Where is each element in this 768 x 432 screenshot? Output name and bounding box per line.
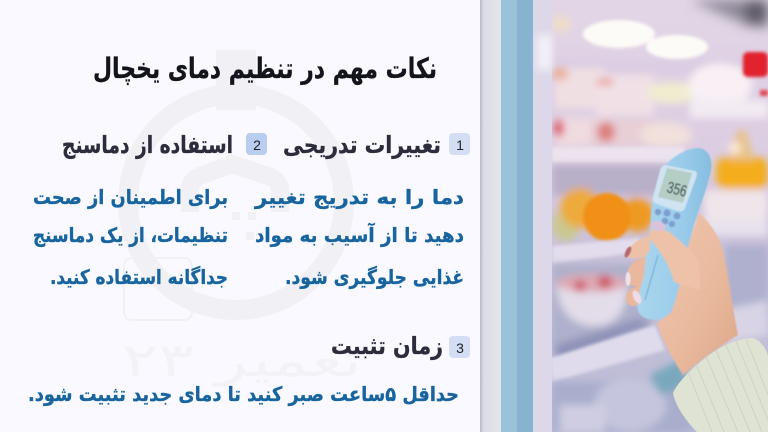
watermark: logo xyxy=(124,60,344,320)
oranges xyxy=(552,162,668,244)
photo: fridge interior xyxy=(480,0,768,432)
text block: item 1 column xyxy=(254,185,464,289)
small light xyxy=(550,16,572,32)
thermometer screen xyxy=(658,168,692,203)
bottom shelf xyxy=(550,325,665,382)
text block: item 1 column: دما را به تدریج تغییر xyxy=(254,185,464,209)
hand: thumb xyxy=(649,229,700,290)
lower shelf xyxy=(552,238,640,264)
text block: item 3: حداقل ۵ساعت صبر کنید تا دمای جدید تثبیت شود. xyxy=(28,382,459,406)
badge 1: 1 xyxy=(456,137,464,153)
yellow jar xyxy=(692,130,768,236)
text block: item 1 column: دهید تا از آسیب به مواد xyxy=(255,222,464,247)
main orange xyxy=(583,193,631,241)
lower shelf dark gap and bowl xyxy=(552,245,768,365)
reading: 356 xyxy=(665,179,689,201)
hand and thermometer xyxy=(623,148,738,375)
badge 2 xyxy=(246,133,267,155)
heading row: items 1 and 2 xyxy=(62,131,470,159)
ceiling lights xyxy=(583,20,708,59)
text block: item 2 column: تنظیمات، از یک دماسنج xyxy=(33,223,228,247)
heading: gradual changes: تغییرات تدریجی xyxy=(283,131,441,159)
badge 3: 3 xyxy=(456,340,464,356)
thermometer seam xyxy=(645,255,658,300)
hand: fingers xyxy=(626,236,650,306)
fridge background xyxy=(552,0,768,432)
heading: stabilisation time: زمان تثبیت xyxy=(331,332,443,360)
text block: item 2 column: برای اطمینان از صحت xyxy=(33,185,228,209)
upper shelf xyxy=(552,147,684,163)
watermark: brand text: تعمیر ۲۳ xyxy=(122,333,362,388)
panel: text background xyxy=(0,0,480,432)
badge 1 xyxy=(449,133,470,155)
upper shelf items xyxy=(552,63,768,148)
thermometer buttons xyxy=(655,209,680,227)
text block: item 1 column: غذایی جلوگیری شود. xyxy=(285,265,464,289)
red items xyxy=(743,52,768,96)
title: نکات مهم در تنظیم دمای یخچال xyxy=(93,52,437,85)
text block: item 2 column: جداگانه استفاده کنید. xyxy=(50,265,228,289)
bottom contents xyxy=(552,300,768,432)
badge 3 xyxy=(449,336,470,358)
fridge ceiling xyxy=(692,0,768,34)
fingernails xyxy=(623,219,667,305)
heading: use a thermometer: استفاده از دماسنج xyxy=(62,131,233,159)
badge 2: 2 xyxy=(253,137,261,153)
fridge door xyxy=(480,0,552,432)
text block: item 2 column xyxy=(33,185,228,289)
hand: back xyxy=(657,213,738,375)
sweater sleeve xyxy=(673,338,768,432)
thermometer screen bezel xyxy=(653,165,697,211)
thermometer xyxy=(637,148,711,320)
